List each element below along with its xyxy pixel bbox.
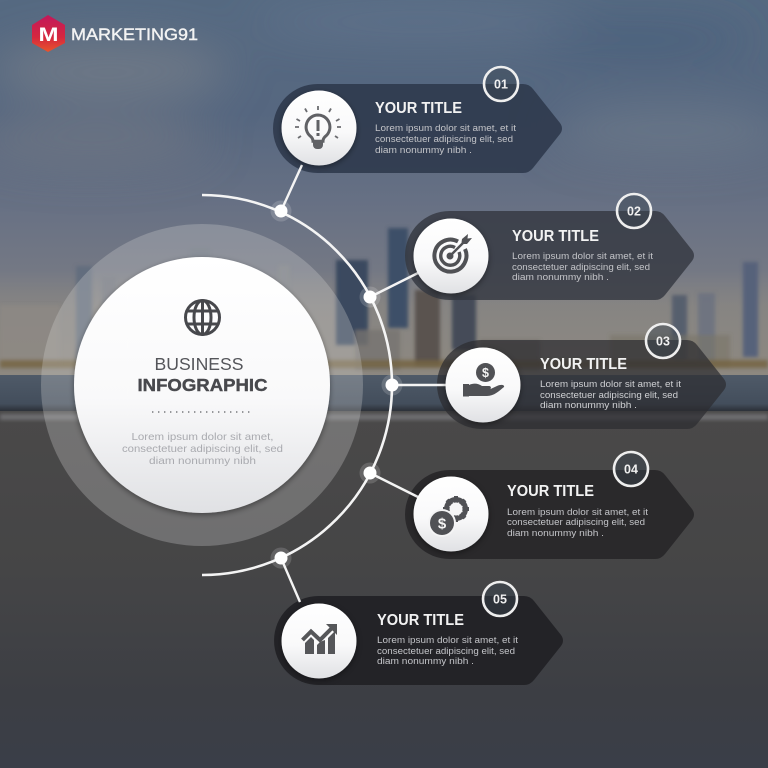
- icon circle 2: target: [414, 218, 488, 294]
- logo hexagon mark: M: [38, 25, 58, 46]
- card 5 number: [483, 582, 517, 616]
- description: diam nonummy nibh: [149, 455, 256, 467]
- card 5 text: consectetuer adipiscing elit, sed: [377, 646, 515, 657]
- card 3 text: diam nonummy nibh .: [540, 400, 637, 411]
- card 5 text: diam nonummy nibh .: [377, 656, 474, 667]
- card 1 text: consectetuer adipiscing elit, sed: [375, 134, 513, 145]
- card 2 number: [617, 194, 651, 228]
- logo: Marketing91: [32, 15, 198, 52]
- card 3 text: Lorem ipsum dolor sit amet, et it: [540, 379, 681, 390]
- card 3 title: YOUR TITLE: [540, 356, 627, 373]
- card 1 text: Lorem ipsum dolor sit amet, et it: [375, 123, 516, 134]
- card 2 text: consectetuer adipiscing elit, sed: [512, 262, 650, 273]
- logo hexagon mark: [32, 15, 65, 52]
- spokes: [281, 165, 447, 602]
- dotted divider: [152, 411, 254, 413]
- card 2 number: 02: [627, 204, 641, 218]
- card 2 text: diam nonummy nibh .: [512, 272, 609, 283]
- central circle: business infographic: [41, 224, 363, 546]
- description: consectetuer adipiscing elit, sed: [122, 443, 283, 455]
- outer translucent ring: [41, 224, 363, 546]
- card 1 number: [484, 67, 518, 101]
- card 5 number: 05: [493, 592, 507, 606]
- icon circle 1: light bulb: [282, 90, 356, 166]
- card 3 text: consectetuer adipiscing elit, sed: [540, 390, 678, 401]
- icon circle 4: gear and dollar coin: $: [438, 516, 447, 532]
- card 4 text: consectetuer adipiscing elit, sed: [507, 517, 645, 528]
- icon circle 5: rising chart: [282, 604, 356, 678]
- icon circle 3: hand with coin: $: [482, 366, 489, 380]
- card 5 title: YOUR TITLE: [377, 612, 464, 629]
- card 2 title: YOUR TITLE: [512, 228, 599, 245]
- card 4 text: diam nonummy nibh .: [507, 528, 604, 539]
- white disc: [74, 257, 330, 513]
- node halos: [270, 200, 402, 568]
- card 4: [405, 452, 694, 559]
- icon circle 3: hand with coin: [446, 348, 520, 422]
- card 1 title: YOUR TITLE: [375, 100, 462, 117]
- card 1 panel: [273, 84, 562, 173]
- card 1 text: diam nonummy nibh .: [375, 145, 472, 156]
- card 4 panel: [405, 470, 694, 559]
- card 4 number: [614, 452, 648, 486]
- icon: globe: [186, 300, 220, 334]
- icon circle 4: gear and dollar coin: [414, 476, 488, 552]
- card 4 title: YOUR TITLE: [507, 483, 594, 500]
- card 1: [273, 67, 562, 173]
- card 5 text: Lorem ipsum dolor sit amet, et it: [377, 635, 518, 646]
- connector arc with nodes: [202, 165, 447, 602]
- card 3 text: [540, 379, 681, 411]
- card 4 text: Lorem ipsum dolor sit amet, et it: [507, 507, 648, 518]
- card 2: [405, 194, 694, 300]
- card 2 panel: [405, 211, 694, 300]
- card 5 panel: [274, 596, 563, 685]
- arc: [202, 195, 392, 575]
- card 3: [437, 324, 726, 429]
- card 3 number: 03: [656, 334, 670, 348]
- card 1 text: [375, 123, 516, 156]
- nodes: [274, 204, 398, 564]
- card 4 text: [507, 507, 648, 539]
- card 5: [274, 582, 563, 685]
- description: [122, 431, 283, 467]
- heading: BUSINESS: [154, 354, 244, 374]
- logo wordmark: MARKETING91: [71, 25, 198, 44]
- card 5 text: [377, 635, 518, 667]
- heading bold: INFOGRAPHIC: [138, 375, 268, 395]
- card 2 text: [512, 251, 653, 283]
- description: Lorem ipsum dolor sit amet,: [132, 431, 274, 443]
- card 1 number: 01: [494, 78, 508, 92]
- card 3 panel: [437, 340, 726, 429]
- card 4 number: 04: [624, 462, 638, 476]
- card 3 number: [646, 324, 680, 358]
- card 2 text: Lorem ipsum dolor sit amet, et it: [512, 251, 653, 262]
